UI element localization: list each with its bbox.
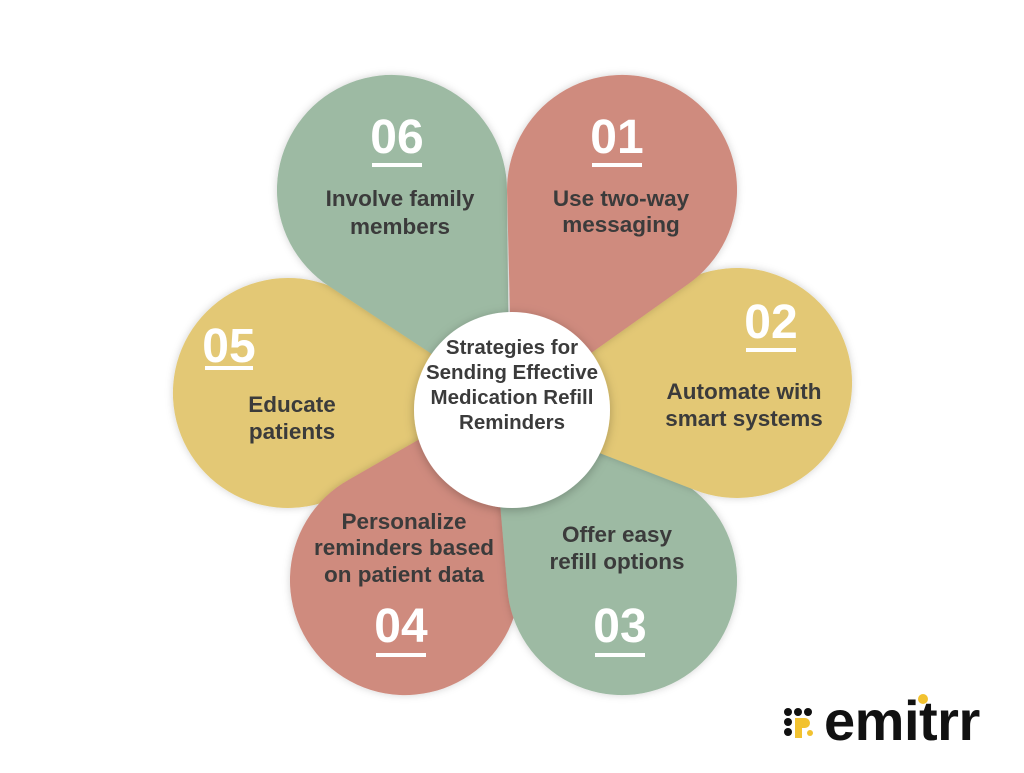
logo: emitrr: emitrr xyxy=(824,689,980,752)
petal 05 xyxy=(165,270,541,526)
label 04 xyxy=(314,509,494,657)
label 04: on patient data xyxy=(324,562,484,587)
petal 02 xyxy=(480,255,865,526)
label 04: 04 xyxy=(374,600,428,653)
label 06: 06 xyxy=(370,111,424,164)
label 01: 01 xyxy=(590,111,644,164)
label 04: reminders based xyxy=(314,535,494,560)
petal 04 xyxy=(246,311,633,739)
label 06: Involve family xyxy=(326,186,475,211)
center title: Medication Refill xyxy=(431,386,593,409)
label 02: 02 xyxy=(744,296,798,349)
label 05 xyxy=(202,320,336,444)
label 02 xyxy=(665,296,823,431)
center title xyxy=(426,336,598,434)
petal 03 xyxy=(392,312,781,739)
label 06 xyxy=(326,111,475,239)
center title: Sending Effective xyxy=(426,361,598,384)
petal 01 xyxy=(409,36,776,461)
label 03: Offer easy xyxy=(562,522,673,547)
label 05: patients xyxy=(249,419,335,444)
label 05: 05 xyxy=(202,320,256,373)
label 03: refill options xyxy=(550,549,684,574)
label 04: Personalize xyxy=(341,509,467,534)
center title: Reminders xyxy=(459,411,565,434)
label 01 xyxy=(553,111,690,237)
label 02: smart systems xyxy=(665,406,823,431)
label 01: messaging xyxy=(562,212,680,237)
petal 06 xyxy=(236,34,610,460)
label 06: members xyxy=(350,214,450,239)
label 02: Automate with xyxy=(666,379,822,404)
center circle xyxy=(414,312,610,508)
label 01: Use two-way xyxy=(553,186,690,211)
center title: Strategies for xyxy=(446,336,578,359)
label 03: 03 xyxy=(593,600,647,653)
label 05: Educate xyxy=(248,392,336,417)
label 03 xyxy=(550,522,684,657)
